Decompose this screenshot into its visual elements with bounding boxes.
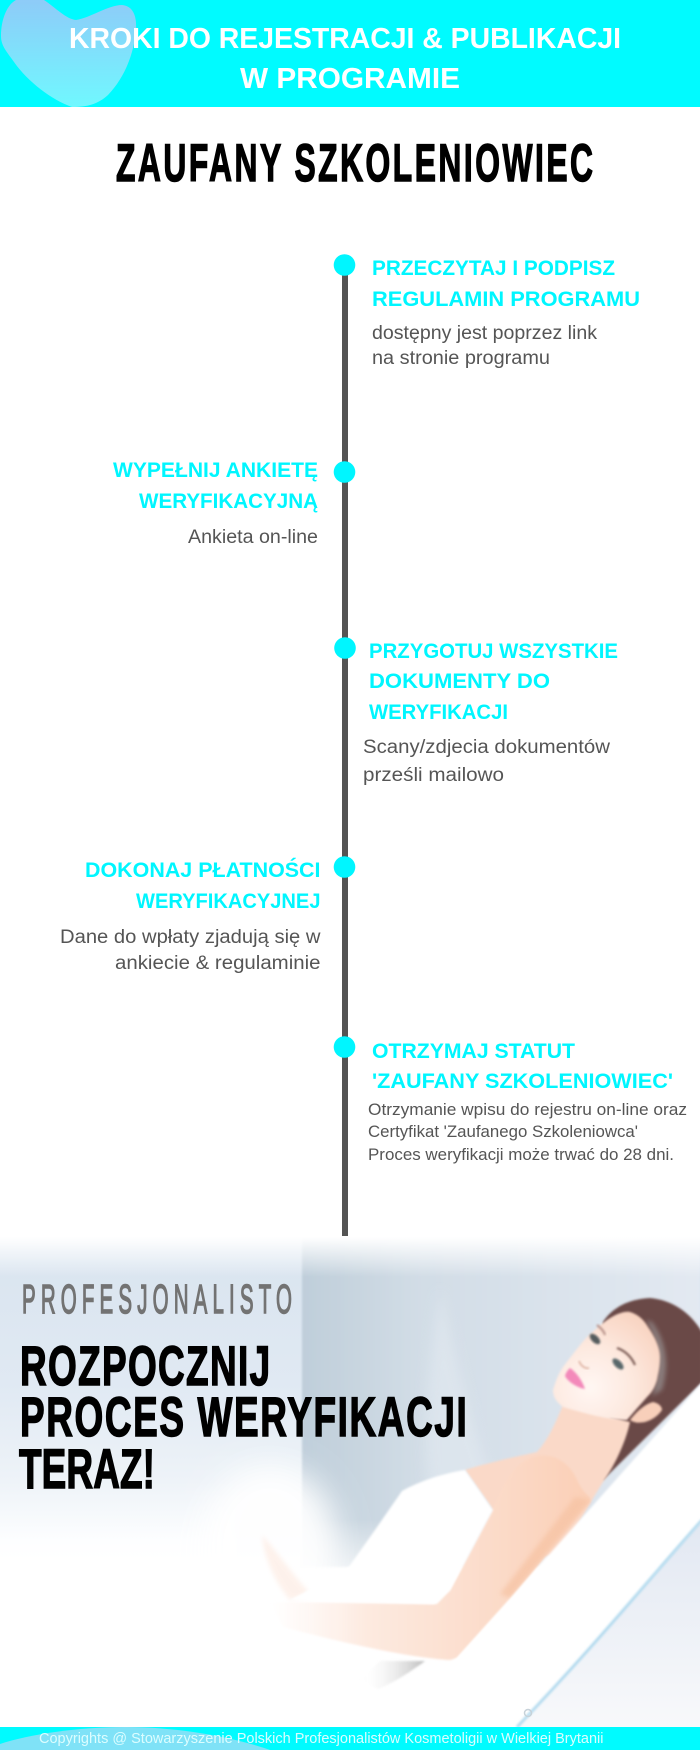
step 1 heading: REGULAMIN PROGRAMU [372,288,640,311]
face [553,1312,660,1420]
lips [565,1368,585,1389]
step 5 heading: 'ZAUFANY SZKOLENIOWIEC' [372,1070,673,1093]
header title: W PROGRAMIE [240,63,460,95]
step 3 text: prześli mailowo [363,765,504,786]
step 4 text: ankiecie & regulaminie [115,953,320,974]
hair [590,1298,700,1480]
icon: decorative blob [1,0,136,107]
step 3 heading: PRZYGOTUJ WSZYSTKIE [369,640,618,663]
step 5 text: Proces weryfikacji może trwać do 28 dni. [368,1146,674,1164]
step 5 heading [372,1040,673,1093]
step 5 [334,1036,687,1164]
step 5 marker [334,1036,355,1058]
timeline line [342,265,348,1236]
step 2 heading: WERYFIKACYJNĄ [139,490,318,513]
step 1 [334,254,640,369]
step 4 [60,856,355,974]
step 4 heading [85,858,320,913]
step 4 marker [334,856,355,878]
step 5 text [368,1101,687,1164]
step 2 marker [334,461,355,483]
hand [262,1539,306,1599]
step 1 text: na stronie programu [372,348,550,369]
header title [69,23,621,95]
main heading: ZAUFANY SZKOLENIOWIEC [116,134,593,193]
step 2 heading: WYPEŁNIJ ANKIETĘ [113,459,318,482]
footer blob [0,1727,270,1750]
step 3 marker [334,637,356,659]
step 3 [334,637,618,786]
step 4 text: Dane do wpłaty zjadują się w [60,927,321,948]
call to action headline: ROZPOCZNIJ [20,1335,270,1398]
step 3 heading: DOKUMENTY DO [369,670,550,693]
step 4 heading: DOKONAJ PŁATNOŚCI [85,858,320,882]
step 5 text: Certyfikat 'Zaufanego Szkoleniowca' [368,1123,638,1141]
step 2 [113,459,355,548]
step 3 heading [369,640,618,724]
arm [270,1455,590,1660]
step 1 heading [372,257,640,311]
step 5 heading: OTRZYMAJ STATUT [372,1040,575,1063]
step 4 heading: WERYFIKACYJNEJ [136,890,320,913]
ear [630,1402,662,1423]
photo backdrop [0,1242,700,1567]
step 2 heading [113,459,318,513]
step 1 text [372,323,598,369]
step 1 heading: PRZECZYTAJ I PODPISZ [372,257,615,280]
shadow under arm [384,1660,424,1684]
call to action headline: TERAZ! [19,1438,155,1501]
header banner [0,0,700,107]
call to action headline [19,1335,467,1501]
step 2 text: Ankieta on-line [188,527,318,548]
subheading: PROFESJONALISTO [22,1276,292,1322]
step 3 heading: WERYFIKACJI [369,701,508,724]
footer bar [0,1727,700,1750]
step 1 marker [334,254,355,276]
nose shadow [579,1361,589,1368]
neck and shoulder [465,1405,630,1556]
bed [456,1383,700,1727]
step 1 text: dostępny jest poprzez link [372,323,598,344]
eyes [588,1325,635,1371]
step 4 text [60,927,321,974]
step 3 text: Scany/zdjecia dokumentów [363,737,610,758]
call to action headline: PROCES WERYFIKACJI [20,1386,467,1449]
step 5 text: Otrzymanie wpisu do rejestru on-line oraz [368,1101,687,1119]
copyright: Copyrights @ Stowarzyszenie Polskich Profesjonalistów Kosmetoligii w Wielkiej Brytanii [39,1730,604,1747]
towel [290,1470,493,1604]
header title: KROKI DO REJESTRACJI & PUBLIKACJI [69,23,621,55]
photo: woman reclining on a spa bed [0,1237,700,1729]
step 3 text [363,737,610,786]
